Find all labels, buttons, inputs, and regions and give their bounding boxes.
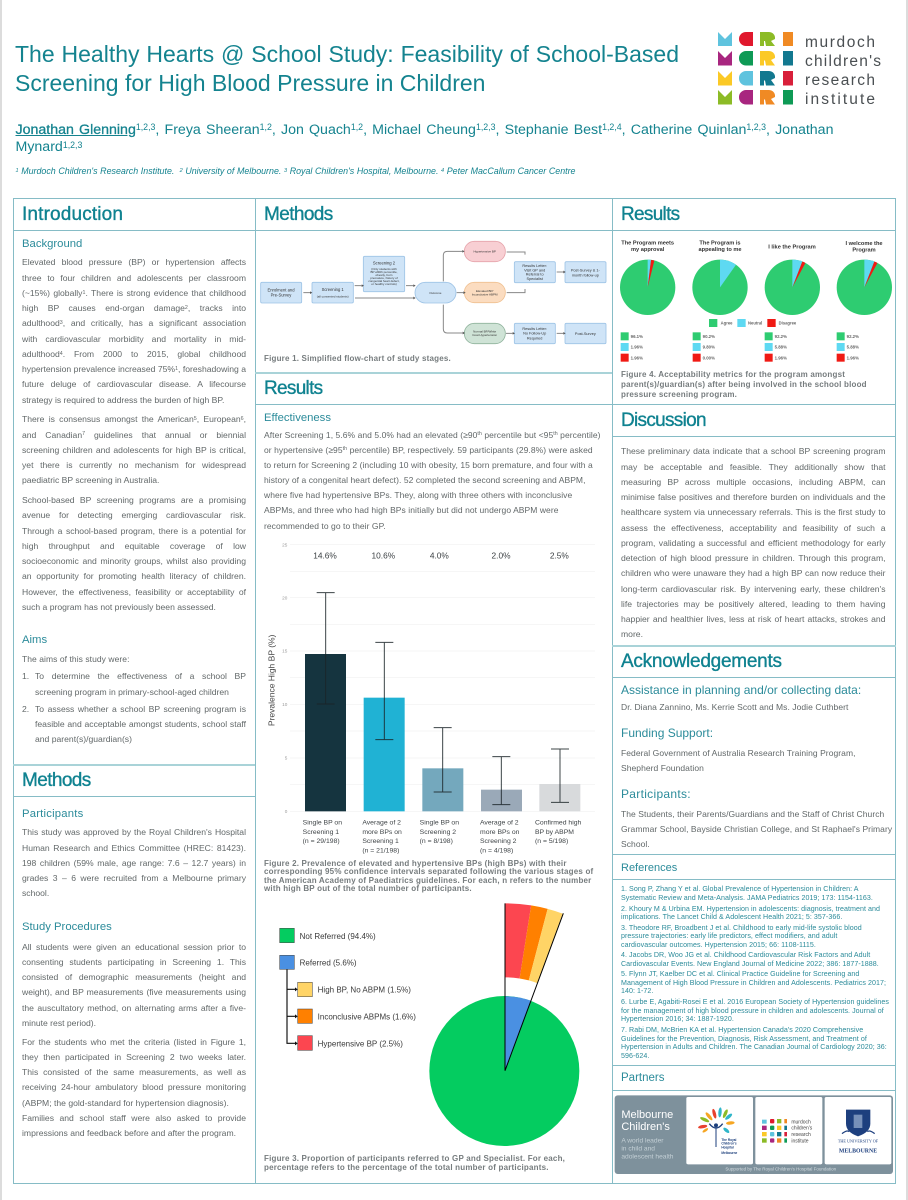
heading: Introduction: Introduction <box>22 204 123 225</box>
caption: figure 2: corresponding 95% confidence intervals separated following the various stages of <box>264 867 593 876</box>
text: effectiveness <box>264 430 601 531</box>
reference 3 <box>621 924 862 949</box>
flow chart: study stages: Inconclusive ABPM <box>472 293 498 297</box>
reference 5 <box>621 970 886 995</box>
flow chart: study stages: premature, history of <box>370 276 398 280</box>
flow chart: study stages: Post-Survey & 1- <box>571 269 601 273</box>
text: aims intro: The aims of this study were: <box>22 654 130 664</box>
title: Screening for High Blood Pressure in Children <box>15 70 485 96</box>
text: background paragraph 3: School-based BP screening programs are a promising <box>22 495 246 505</box>
text: background paragraph 3: such a program has not previously been assessed. <box>22 602 216 612</box>
subheading: assistance: Assistance in planning and/or collecting data: <box>621 683 861 697</box>
bar chart: prevalence of high BP: (n = 4/198) <box>480 847 513 854</box>
text: procedures paragraph 1: weight), and BP measurements (five measurements using <box>22 987 246 997</box>
panel: references <box>612 854 896 1066</box>
text: background paragraph 3: However, the effectiveness, feasibility or acceptability of <box>22 586 246 596</box>
partner logos banner: A world leader <box>621 1138 664 1145</box>
text: procedures paragraph 1 <box>22 942 246 1028</box>
text: background paragraph 2 <box>22 414 246 485</box>
reference 1: Systematic Review and Meta-Analysis. JAMA Pediatrics 2019; 173: 1154-1163. <box>621 894 873 902</box>
list: aim 2: To assess whether a school BP screening program is <box>35 704 246 714</box>
bar chart: prevalence of high BP: Average of 2 <box>362 820 401 827</box>
text: background paragraph 3 <box>22 495 246 612</box>
text: participants: grades 3 – 6 were recruited from a Melbourne primary <box>22 873 246 883</box>
text: effectiveness: to return for Screening 2 (including 10 with obesity, 15 born premature, and four with a <box>264 460 593 470</box>
text: background paragraph 3: avenue for detecting emerging cardiovascular risk. <box>22 510 246 520</box>
reference 6 <box>621 998 889 1023</box>
text: procedures paragraph 1: consisted of demographic measurements (height and <box>22 972 246 982</box>
text: participants: The Students, their Parents/Guardians and the Staff of Christ Church <box>621 808 884 818</box>
heading: Methods: Methods <box>264 204 333 225</box>
flow chart: study stages: Normal BP/White <box>473 330 496 334</box>
text: participants: This study was approved by the Royal Children's Hospital <box>22 827 246 837</box>
text: funding <box>621 748 856 773</box>
flow chart: study stages: congenital heart defect, <box>368 279 400 283</box>
flow chart: study stages: (all consented students) <box>317 295 349 299</box>
reference 6: for the management of high blood pressure in children and adolescents. Journal of <box>621 1007 884 1015</box>
text: background paragraph 2: There is consensus amongst the American5, European6, <box>22 414 246 424</box>
list: aim 2: feasible and acceptable amongst students, school staff <box>35 719 246 729</box>
pie charts: acceptability: appealing to me <box>698 247 742 253</box>
pie charts: acceptability: 92.2% <box>847 334 859 339</box>
bar chart: prevalence of high BP: (n = 29/198) <box>303 838 340 845</box>
text: background paragraph 3: Through a school-based program, there is a potential for <box>22 526 246 536</box>
text: background paragraph 1: Elevated blood pressure (BP) or hypertension affects <box>22 257 246 267</box>
partner logos banner: Children's <box>621 1121 670 1133</box>
bar chart: prevalence of high BP <box>267 542 595 854</box>
text: procedures paragraph 2: (ABPM; the gold-standard for hypertension diagnosis). <box>22 1098 229 1108</box>
list: aim 2 <box>22 704 246 744</box>
heading: Partners: Partners <box>621 1072 664 1084</box>
text: background paragraph 2: yet there is currently no mechanism for widespread <box>22 460 246 470</box>
icon: Royal Children's Hospital tree: Children's <box>721 1142 737 1146</box>
bar chart: prevalence of high BP: Screening 1 <box>362 838 399 845</box>
pie charts: acceptability: 1.96% <box>775 356 787 361</box>
caption: figure 3: Figure 3. Proportion of participants referred to GP and Specialist. For each, <box>264 1154 565 1163</box>
pie charts: acceptability: 90.2% <box>703 334 715 339</box>
subheading: Study Procedures: Study Procedures <box>22 921 112 933</box>
pie charts: acceptability: Agree <box>721 321 733 326</box>
bar chart: prevalence of high BP: Screening 2 <box>420 829 456 836</box>
reference 6: Hypertension 2016; 34: 1887-1920. <box>621 1015 734 1023</box>
text: procedures paragraph 2 <box>22 1036 246 1108</box>
pie charts: acceptability: 96.1% <box>631 334 643 339</box>
text: discussion: minimise false positives and therefore burden on individuals and the <box>621 492 886 502</box>
text: discussion: healthcare system via unnecessary referrals. This is the first study to <box>621 507 886 517</box>
text: background paragraph 3: high throughput and equitable coverage of low <box>22 541 246 551</box>
pie charts: acceptability: my approval <box>631 247 665 253</box>
flow chart: study stages: Elevated BP/ <box>476 289 494 293</box>
text: discussion <box>621 446 886 639</box>
list: aim 1 <box>22 671 246 697</box>
bar chart: prevalence of high BP: 10.6% <box>372 550 396 560</box>
text: discussion: happier and healthier lives, less at risk of heart attacks, strokes and <box>621 614 886 624</box>
text: effectiveness: ABPMs, and three who had high BPs initially but did not undergo ABPM were <box>264 505 558 515</box>
text: funding: Federal Government of Australia Research Training Program, <box>621 748 856 758</box>
icon: Royal Children's Hospital tree: Melbourne <box>721 1151 738 1155</box>
reference 3: cardiovascular outcomes. Hypertension 2015; 66: 1108-1115. <box>621 941 816 949</box>
pie charts: acceptability: 5.88% <box>847 345 859 350</box>
icon: Royal Children's Hospital tree <box>698 1108 738 1155</box>
text: participants: 198 children (59% male, age range: 7.6 – 12.7 years) in <box>22 858 246 868</box>
reference 5: 5. Flynn JT, Kaelber DC et al. Clinical Practice Guideline for Screening and <box>621 970 859 978</box>
bar chart: prevalence of high BP: 5 <box>285 756 288 761</box>
panel: results centre <box>255 372 613 1184</box>
reference 4 <box>621 951 879 968</box>
text: background paragraph 1: adulthood4. From 2000 to 2015, global childhood <box>22 349 246 359</box>
text: procedures paragraph 1: consenting students participating in Screening 1. This <box>22 957 246 967</box>
heading: References: References <box>621 862 677 874</box>
left page edge <box>0 0 2 1200</box>
text: procedures paragraph 2: For the students who met the criteria (listed in Figure 1, <box>22 1036 246 1046</box>
icon: MCRI mini logo <box>762 1119 813 1145</box>
bar chart: prevalence of high BP: (n = 21/198) <box>362 847 399 854</box>
caption: figure 2: with high BP out of the total number of participants. <box>264 884 472 893</box>
text: discussion: may be acceptable and feasible. They additionally show that <box>621 462 886 472</box>
caption: figure 1: Figure 1. Simplified flow-chart of study stages. <box>264 354 451 363</box>
text: procedures paragraph 1: the auscultatory method, on alternating arms after a five- <box>22 1002 246 1012</box>
right page edge <box>906 0 908 1200</box>
panel: acknowledgements <box>612 645 896 855</box>
pie charts: acceptability: 1.96% <box>847 356 859 361</box>
icon: MCRI mini logo: institute <box>791 1139 809 1145</box>
text: background paragraph 1: hypertension prevalence increased 75%1, foreshadowing a <box>22 364 246 374</box>
bar chart: prevalence of high BP: Screening 2 <box>480 838 517 845</box>
flow chart: study stages: Screening 1 <box>322 287 344 292</box>
icon: MCRI mini logo: murdoch <box>791 1120 811 1126</box>
panel: discussion <box>612 404 896 646</box>
icon: MCRI mini logo: children's <box>791 1126 813 1132</box>
legend: Inconclusive ABPMs (1.6%) <box>318 1013 416 1022</box>
flow chart: study stages: Visit GP and <box>524 269 545 273</box>
list: aim 1: screening program in primary-school-aged children <box>35 687 229 697</box>
flow chart: study stages: Screening 2 <box>373 261 396 266</box>
pie charts: acceptability <box>620 240 892 362</box>
text: background paragraph 2: and Canadian7 guidelines that annual or biennial <box>22 430 246 440</box>
text: background paragraph 1: high BP causes end-organ damage2, tracks into <box>22 303 246 313</box>
text: discussion: These preliminary data indicate that a school BP screening program <box>621 446 886 456</box>
reference 5: Management of High Blood Pressure in Children and Adolescents. Pediatrics 2017; <box>621 979 886 987</box>
text: procedures paragraph 3 <box>22 1113 246 1138</box>
bar chart: prevalence of high BP: Screening 1 <box>303 829 339 836</box>
text: background paragraph 1: three to four children and adolescents per classroom <box>22 273 246 283</box>
y axis title: Prevalence High BP (%) <box>267 634 277 726</box>
authors <box>16 122 833 155</box>
heading: Discussion: Discussion <box>621 410 706 431</box>
panel: introduction <box>13 198 256 765</box>
pie charts: acceptability: Program <box>852 248 876 254</box>
flow chart: study stages: Specialist <box>526 277 544 281</box>
pie charts: acceptability: 1.96% <box>631 345 643 350</box>
flow chart: study stages: Results Letter: <box>522 264 547 268</box>
reference 1 <box>621 885 873 902</box>
pie charts: acceptability: The Program meets <box>621 241 674 247</box>
bar chart: prevalence of high BP: BP by ABPM <box>535 829 574 836</box>
subheading: funding: Funding Support: <box>621 726 713 740</box>
subheading: Participants: Participants <box>22 808 83 820</box>
caption: figure 3 <box>264 1154 565 1172</box>
bar chart: prevalence of high BP: (n = 5/198) <box>535 838 568 845</box>
legend: Referred (5.6%) <box>300 959 357 968</box>
heading: Acknowledgements: Acknowledgements <box>621 651 782 672</box>
text: discussion: detection of high blood pressure in children. Through this program, <box>621 553 886 563</box>
bar chart: prevalence of high BP: Single BP on <box>303 820 342 827</box>
panel: results right <box>612 198 896 405</box>
partner logos banner <box>614 1095 893 1174</box>
subheading: Effectiveness: Effectiveness <box>264 412 331 424</box>
reference 2 <box>621 905 880 921</box>
flow chart: study stages: Enrolment and <box>267 288 295 293</box>
text: discussion: assess the effectiveness, acceptability and feasibility of such a <box>621 523 886 533</box>
text: discussion: program, validating a successful and efficient methodology for early <box>621 538 886 548</box>
pie charts: acceptability: Neutral <box>748 321 762 326</box>
text: procedures paragraph 2: they then participated in Screening 2 two weeks later. <box>22 1052 246 1062</box>
flow chart: study stages: month follow-up <box>572 274 599 278</box>
reference 5: 140: 1-72. <box>621 987 653 995</box>
caption: figure 2 <box>264 859 594 893</box>
bar chart: prevalence of high BP: 2.5% <box>550 550 569 560</box>
icon: University of Melbourne crest: MELBOURNE <box>839 1149 877 1155</box>
partner logos banner: adolescent health <box>621 1154 674 1161</box>
text: participants: Grammar School, Bayside Christian College, and St Raphael's Primary <box>621 824 892 834</box>
caption: figure 4: Figure 4. Acceptability metrics for the program amongst <box>621 370 845 379</box>
logo: Murdoch Children's Research Institute: children's <box>805 53 881 70</box>
reference 1: 1. Song P, Zhang Y et al. Global Prevalence of Hypertension in Children: A <box>621 885 859 893</box>
text: background paragraph 1 <box>22 257 246 405</box>
bar chart: prevalence of high BP: 0 <box>285 809 288 814</box>
text: procedures paragraph 2: This consisted of the same measurements, as well as <box>22 1067 246 1077</box>
caption: figure 4: parent(s)/guardian(s) after being involved in the school blood <box>621 380 867 389</box>
flow chart: study stages: Outcome <box>429 291 442 295</box>
text: procedures paragraph 1: minute rest period). <box>22 1018 96 1028</box>
text: background paragraph 1: with cardiovascular morbidity and mortality in mid- <box>22 334 246 344</box>
reference 7: 7. Rabi DM, McBrien KA et al. Hypertension Canada's 2020 Comprehensive <box>621 1026 863 1034</box>
text: procedures paragraph 2: receiving 24-hour ambulatory blood pressure monitoring <box>22 1082 246 1092</box>
legend: High BP, No ABPM (1.5%) <box>318 986 411 995</box>
text: participants: school. <box>22 888 49 898</box>
caption: figure 4 <box>621 370 867 399</box>
legend: Not Referred (94.4%) <box>300 932 376 941</box>
bar chart: prevalence of high BP: 15 <box>282 649 288 654</box>
flow chart: study stages: or healthy controls) <box>371 282 397 286</box>
authors: Jonathan Glenning1,2,3, Freya Sheeran1,2, Jon Quach1,2, Michael Cheung1,2,3, Stephanie Best1,2,4, Catherine Quinlan1,2,3, Jonathan <box>16 122 833 138</box>
subheading: Aims: Aims <box>22 634 47 646</box>
subheading: Background: Background <box>22 238 82 250</box>
pie charts: acceptability: The Program is <box>699 241 741 247</box>
text: participants <box>621 808 892 849</box>
icon: Royal Children's Hospital tree: The Royal <box>721 1138 737 1142</box>
flow chart: study stages: Pre-Survey <box>271 293 292 298</box>
text: background paragraph 3: an opportunity for promoting health literacy of children. <box>22 571 246 581</box>
text: effectiveness: where five had hypertensive BPs. They, along with three others with inconclusive <box>264 490 572 500</box>
reference 7 <box>621 1026 887 1060</box>
text: background paragraph 1: strategy is required to address the burden of high BP. <box>22 395 224 405</box>
list: aim 1: To determine the effectiveness of a school BP <box>35 671 246 681</box>
text: funding: Shepherd Foundation <box>621 763 704 773</box>
reference 4: 4. Jacobs DR, Woo JG et al. Childhood Cardiovascular Risk Factors and Adult <box>621 951 870 959</box>
text: background paragraph 1: adulthood3, and critically, has a significant association <box>22 318 246 328</box>
pie charts: acceptability: I welcome the <box>845 241 883 247</box>
text: background paragraph 3: socioeconomic and minority groups, whilst also providing <box>22 556 246 566</box>
text: background paragraph 2: screening children and adolescents for high BP is critical, <box>22 445 246 455</box>
logo: Murdoch Children's Research Institute: murdoch <box>805 34 875 51</box>
bar chart: prevalence of high BP: (n = 8/198) <box>420 838 453 845</box>
bar chart: prevalence of high BP: 25 <box>282 542 288 547</box>
title <box>15 41 679 96</box>
flow chart: study stages: BP ≥90th percentile, <box>371 270 398 274</box>
pie charts: acceptability: 9.80% <box>703 345 715 350</box>
text: procedures paragraph 1: All students were given an educational session prior to <box>22 942 246 952</box>
partner logos banner: in child and <box>621 1146 655 1153</box>
subheading: participants: Participants: <box>621 787 691 801</box>
heading: Results: Results <box>264 378 322 399</box>
partner logos banner: Melbourne <box>621 1109 673 1121</box>
pie charts: acceptability: 5.88% <box>775 345 787 350</box>
text: discussion: long-term cardiovascular risk. By intervening early, these children's <box>621 584 886 594</box>
logo: Murdoch Children's Research Institute: institute <box>805 91 875 108</box>
logo: Murdoch Children's Research Institute: research <box>805 72 875 89</box>
heading: Methods: Methods <box>22 770 91 791</box>
text: background paragraph 1: (~15%) globally1. There is strong evidence that childhood <box>22 288 246 298</box>
icon: Royal Children's Hospital tree: Hospital <box>721 1146 734 1150</box>
legend: Hypertensive BP (2.5%) <box>318 1040 403 1049</box>
flow chart: study stages: No Follow-Up <box>523 332 546 336</box>
reference 7: Guidelines for the Prevention, Diagnosis, Risk Assessment, and Treatment of <box>621 1035 867 1043</box>
text: effectiveness: After Screening 1, 5.6% and 5.0% had an elevated (≥90th percentile but <95th percentile) <box>264 430 601 440</box>
pie charts: acceptability: 92.2% <box>775 334 787 339</box>
text: participants <box>22 827 246 898</box>
pie charts: acceptability: I like the Program <box>768 245 816 251</box>
heading: Results: Results <box>621 204 679 225</box>
bar chart: prevalence of high BP: 10 <box>282 702 288 707</box>
pie charts: acceptability: 1.96% <box>631 356 643 361</box>
reference 7: 596-624. <box>621 1052 649 1060</box>
text: discussion: children who were unaware they had a high BP can now reduce their <box>621 568 886 578</box>
icon: University of Melbourne crest: THE UNIVERSITY OF <box>838 1139 879 1144</box>
reference 6: 6. Lurbe E, Agabiti-Rosei E et al. 2016 European Society of Hypertension guidelines <box>621 998 889 1006</box>
text: background paragraph 2: paediatric BP screening in Australia. <box>22 475 159 485</box>
bar chart: prevalence of high BP: 14.6% <box>313 550 337 560</box>
partner logos banner: Supported by The Royal Children's Hospital Foundation <box>725 1167 837 1172</box>
flow chart: study stages: Coat Hypertension <box>472 333 497 337</box>
flow chart: study stages: Hypertensive BP <box>473 250 496 254</box>
title: The Healthy Hearts @ School Study: Feasibility of School-Based <box>15 41 679 67</box>
bar chart: prevalence of high BP: more BPs on <box>362 829 402 836</box>
panel: methods flow chart <box>255 198 613 373</box>
flow chart: study stages: Required <box>527 337 542 341</box>
text: effectiveness: recommended to go to their GP. <box>264 521 386 531</box>
panel: introduction: 1. <box>22 671 29 681</box>
pie chart: referrals <box>279 903 580 1146</box>
flow chart: study stages: (Only students with <box>371 267 397 271</box>
text: effectiveness: history of a congenital heart defect). 52 completed the second screening and ABPM, <box>264 475 586 485</box>
reference 2: implications. The Lancet Child & Adolescent Health 2021; 5: 357-366. <box>621 913 842 921</box>
text: participants: Human Research and Ethics Committee (HREC: 81423). <box>22 843 246 853</box>
flow chart: study stages: Results Letter: <box>522 327 547 331</box>
panel: partners <box>612 1065 896 1184</box>
logo: Murdoch Children's Research Institute <box>718 32 881 108</box>
text: effectiveness: or hypertensive (≥95th percentile) BP, respectively. 59 participants (29.8%) were asked <box>264 445 593 455</box>
reference 7: Hypertension in Adults and Children. The Canadian Journal of Cardiology 2020; 36: <box>621 1043 887 1051</box>
icon: University of Melbourne crest <box>838 1110 879 1155</box>
text: assistance: Dr. Diana Zannino, Ms. Kerrie Scott and Ms. Jodie Cuthbert <box>621 702 848 712</box>
bar chart: prevalence of high BP: 2.0% <box>492 550 511 560</box>
authors: Mynard1,2,3 <box>16 139 82 155</box>
caption: figure 4: pressure screening program. <box>621 390 737 399</box>
text: procedures paragraph 3: impressions and feedback before and after the program. <box>22 1128 236 1138</box>
flow chart: study stages: obesity, born <box>376 273 393 277</box>
flow chart: study stages: Referral to <box>526 273 544 277</box>
bar chart: prevalence of high BP: Confirmed high <box>535 820 582 827</box>
flow chart: study stages <box>260 240 606 344</box>
reference 2: 2. Khoury M & Urbina EM. Hypertension in adolescents: diagnosis, treatment and <box>621 905 880 913</box>
list: aim 2: and parent(s)/guardian(s) <box>35 734 132 744</box>
bar chart: prevalence of high BP: 20 <box>282 595 288 600</box>
bar chart: prevalence of high BP: Single BP on <box>420 820 459 827</box>
panel: methods left <box>13 764 256 1184</box>
caption: figure 3: percentage refers to the percentage of the total number of participants. <box>264 1163 549 1172</box>
caption: figure 2: Figure 2. Prevalence of elevated and hypertensive BPs (high BPs) with their <box>264 859 567 868</box>
reference 4: Cardiovascular Events. New England Journal of Medicine 2022; 386: 1877-1888. <box>621 960 879 968</box>
text: background paragraph 1: future deluge of cardiovascular disease. A lifecourse <box>22 379 246 389</box>
bar chart: prevalence of high BP: more BPs on <box>480 829 520 836</box>
reference 3: 3. Theodore RF, Broadbent J et al. Childhood to early mid-life systolic blood <box>621 924 862 932</box>
affiliations: 1 Murdoch Children's Research Institute. 2 University of Melbourne. 3 Royal Children's Hospital, Melbourne. 4 Peter MacCallum Cancer Centre <box>16 166 576 176</box>
pie charts: acceptability: 0.00% <box>703 356 715 361</box>
text: discussion: life trajectories may be positively altered, leading to them having <box>621 599 886 609</box>
bar chart: prevalence of high BP: 4.0% <box>430 550 449 560</box>
text: participants: School. <box>621 839 650 849</box>
text: discussion: measuring BP across multiple occasions, including ABPM, can <box>621 477 886 487</box>
panel: introduction: 2. <box>22 704 29 714</box>
text: procedures paragraph 3: Families and school staff were also asked to provide <box>22 1113 246 1123</box>
flow chart: study stages: Post-Survey <box>575 332 596 336</box>
caption: figure 2: the American Academy of Paediatrics guidelines. For each, n refers to the number <box>264 876 592 885</box>
legend <box>280 928 416 1050</box>
bar chart: prevalence of high BP: Average of 2 <box>480 820 519 827</box>
pie charts: acceptability: Disagree <box>779 321 797 326</box>
icon: MCRI mini logo: research <box>791 1132 811 1138</box>
reference 3: pressure trajectories: early life predictors, effect modifiers, and adult <box>621 932 837 940</box>
text: discussion: more. <box>621 629 643 639</box>
